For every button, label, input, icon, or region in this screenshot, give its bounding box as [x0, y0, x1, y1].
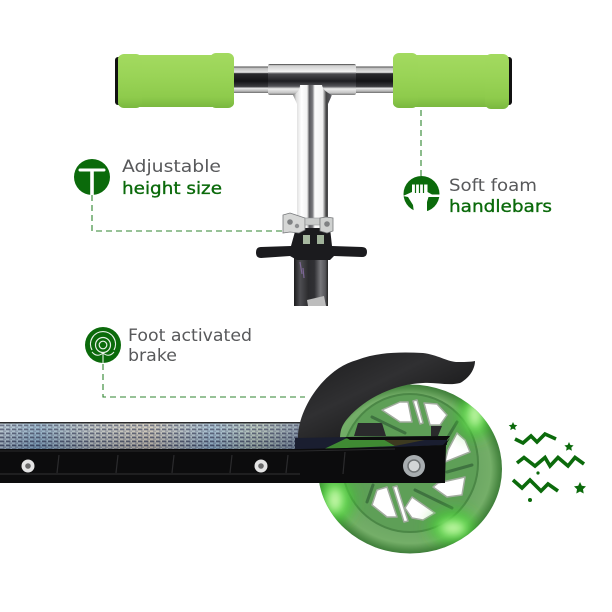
label: soft foam handlebars: handlebars	[449, 197, 552, 217]
icon: brake disc	[85, 327, 121, 363]
collar	[256, 228, 367, 260]
dashed leader: height	[92, 195, 283, 231]
lower black tube	[294, 240, 328, 306]
icon: hand on grip	[403, 176, 441, 213]
zigzag lines	[513, 434, 584, 491]
decorative zigzag motion marks	[509, 422, 586, 502]
callout: foot activated brake	[85, 326, 305, 397]
stars	[509, 422, 586, 502]
label: foot activated brake: brake	[128, 346, 177, 366]
deck tail surface	[295, 436, 447, 452]
deck grip surface	[0, 422, 312, 450]
callout: adjustable height	[74, 157, 283, 231]
wheel openings	[354, 400, 470, 522]
deck side rail	[0, 438, 450, 483]
handlebar crossbar	[232, 64, 395, 95]
label: soft foam handlebars: Soft foam	[449, 176, 537, 196]
wheel tyre	[318, 384, 502, 554]
label: adjustable height size: height size	[122, 179, 222, 199]
right foam grip	[393, 53, 512, 109]
label: adjustable height size: Adjustable	[122, 157, 221, 177]
axle bolt	[403, 455, 425, 477]
chrome stem	[293, 85, 332, 236]
deck screws	[22, 460, 268, 472]
clamp blocks	[283, 213, 305, 233]
dashed leader: brake	[103, 364, 305, 397]
dashed leader: grip	[420, 110, 422, 177]
label: soft foam handlebars	[449, 176, 552, 217]
rear wheel	[318, 384, 502, 554]
callout: soft foam handlebars	[403, 110, 552, 217]
label: foot activated brake: Foot activated	[128, 326, 252, 346]
label: foot activated brake	[128, 326, 252, 366]
left foam grip	[115, 53, 234, 108]
label: adjustable height size	[122, 157, 222, 199]
stem and clamp	[256, 85, 367, 306]
deck	[0, 436, 450, 483]
wheel hub	[342, 394, 478, 532]
wheel LED glows	[318, 393, 490, 542]
wheel spokes	[367, 417, 472, 508]
icon: T handle	[74, 159, 110, 195]
fender	[298, 353, 475, 440]
scooter feature infographic	[0, 53, 586, 554]
